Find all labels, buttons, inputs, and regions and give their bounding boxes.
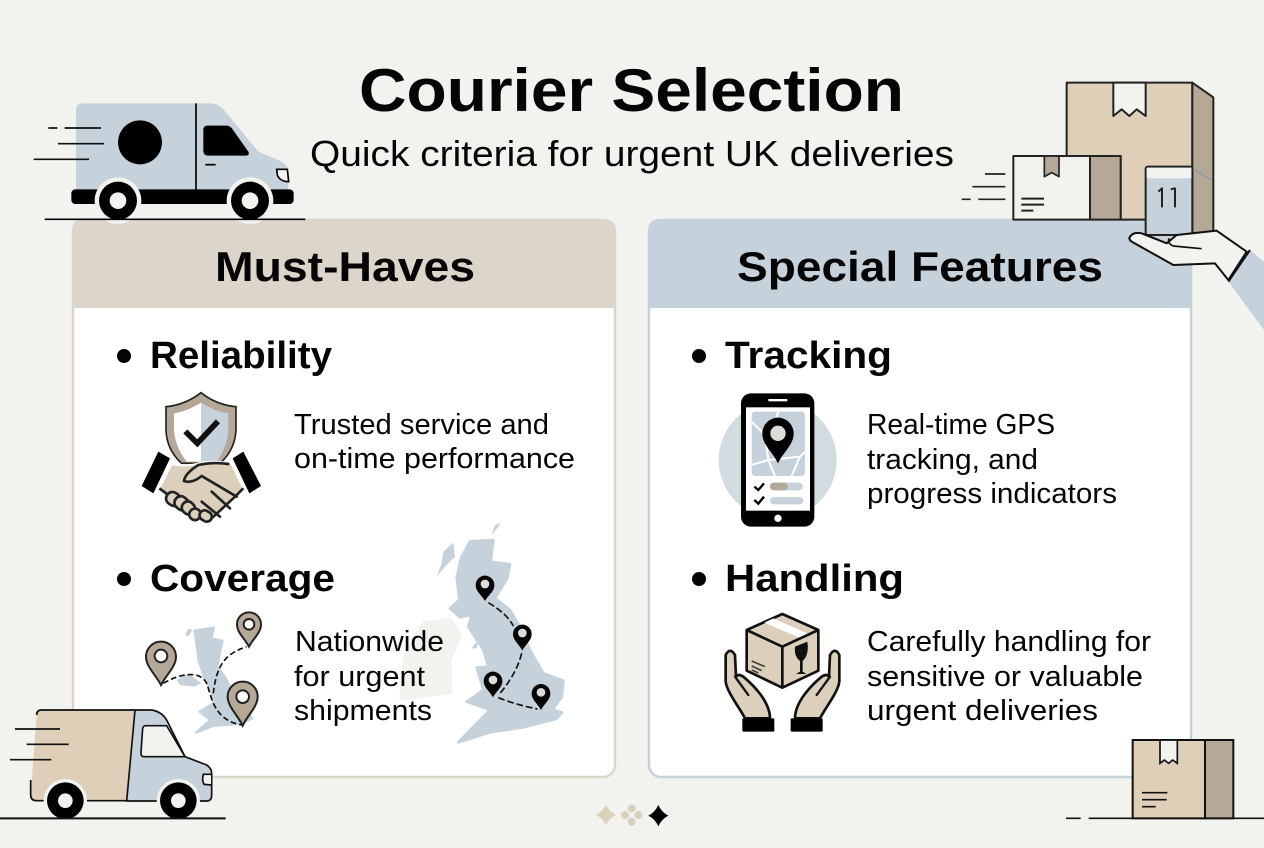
text: handling description: sensitive or valuable xyxy=(867,661,1143,693)
text: tracking description: Real-time GPS xyxy=(867,409,1055,441)
text: tracking description: progress indicators xyxy=(867,478,1117,510)
text: reliability description: Trusted service and xyxy=(294,409,549,441)
icon: hands holding fragile box xyxy=(726,614,839,732)
illustration: blue delivery van xyxy=(34,103,305,224)
text: tracking description xyxy=(867,409,1117,510)
item: coverage heading: Coverage xyxy=(150,558,335,600)
illustration: stacked parcels and hand xyxy=(962,83,1264,330)
illustration: tan delivery van xyxy=(0,710,226,822)
subtitle: Quick criteria for urgent UK deliveries xyxy=(310,133,954,174)
title: Courier Selection xyxy=(359,57,904,124)
icon: shield and handshake xyxy=(142,393,261,523)
heading: special features: Special Features xyxy=(737,243,1103,290)
text: tracking description: tracking, and xyxy=(867,444,1038,476)
decorative sparkle row xyxy=(596,804,668,826)
text: handling description: urgent deliveries xyxy=(867,695,1098,727)
heading: must-haves: Must-Haves xyxy=(215,243,475,290)
item: handling heading: Handling xyxy=(725,558,904,600)
text: coverage description: for urgent xyxy=(294,661,425,693)
text: handling description: Carefully handling for xyxy=(867,626,1151,658)
map: small UK with tan pins xyxy=(146,612,261,733)
icon: phone with GPS map xyxy=(719,393,837,527)
text: reliability description: on-time performance xyxy=(294,443,575,475)
text: handling description xyxy=(867,626,1151,727)
panel header: must-haves xyxy=(72,219,616,308)
map: large UK with route pins xyxy=(402,523,563,742)
panel header: special features xyxy=(648,219,1192,308)
text: coverage description xyxy=(294,626,444,727)
text: coverage description: Nationwide xyxy=(295,626,444,658)
panel: must-haves xyxy=(72,219,616,777)
text: reliability description xyxy=(294,409,575,475)
text: coverage description: shipments xyxy=(294,695,432,727)
item: reliability heading: Reliability xyxy=(150,335,332,377)
item: tracking heading: Tracking xyxy=(725,335,892,377)
panel: special features xyxy=(648,219,1192,777)
illustration: parcel bottom right xyxy=(1066,740,1264,818)
